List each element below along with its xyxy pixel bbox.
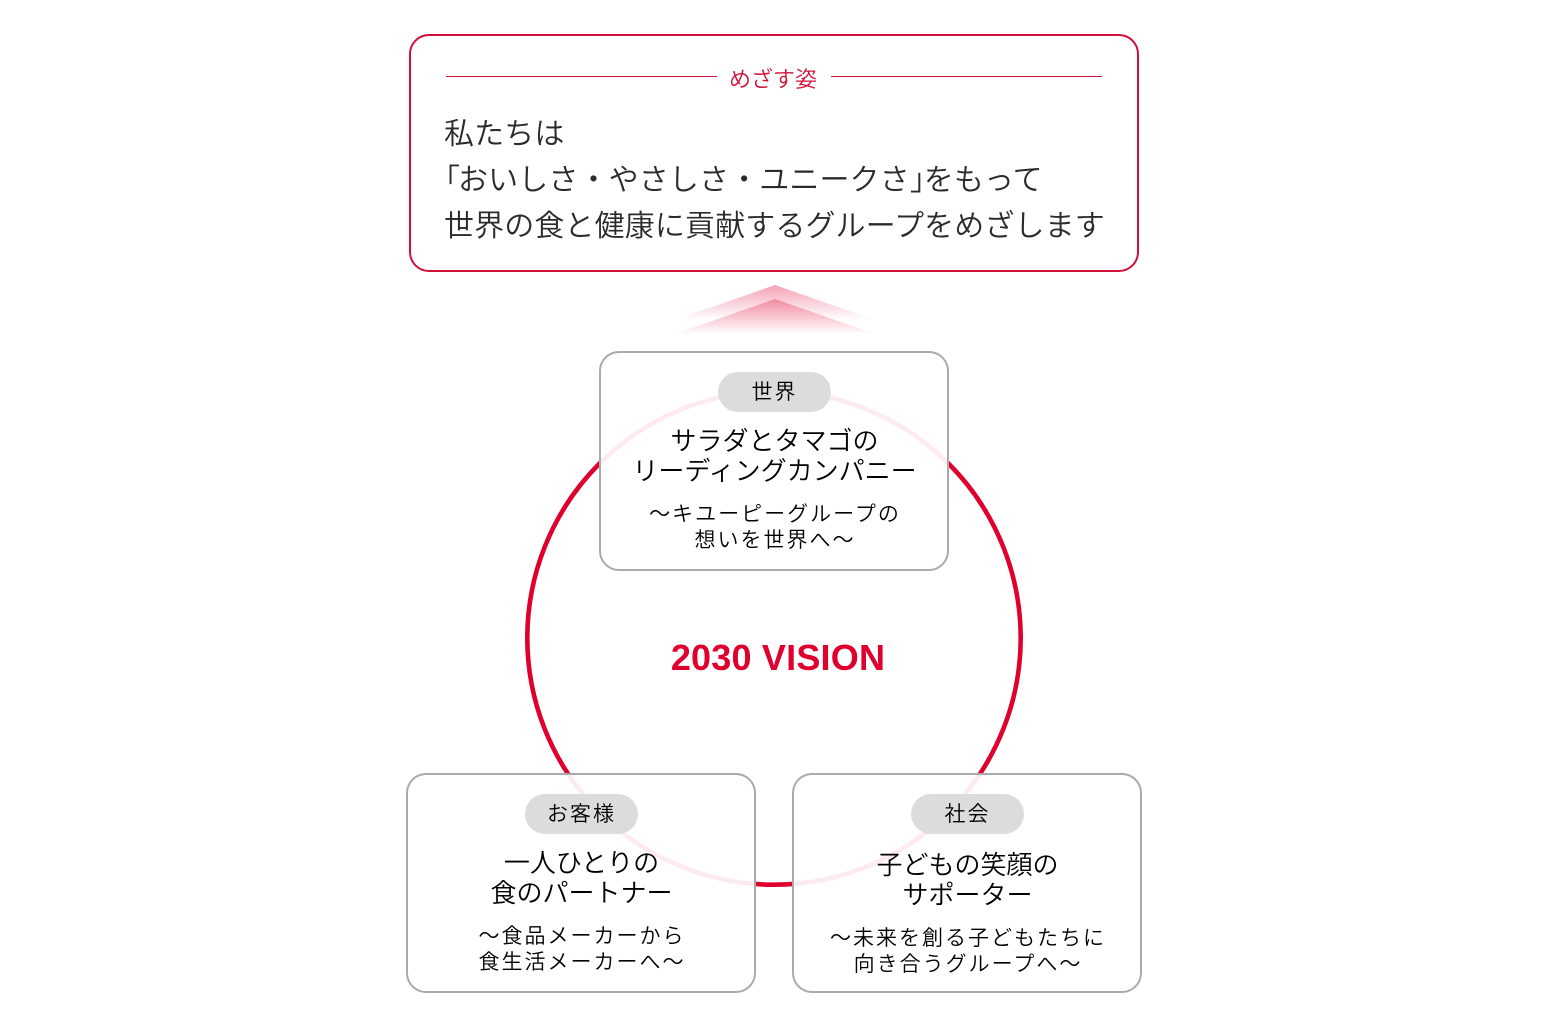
text block: vision statement: 世界の食と健康に貢献するグループをめざします [444,210,1105,243]
card subtitle: society: 向き合うグループへ〜 [854,953,1082,976]
text block: vision statement: 「 [430,164,460,197]
card title: society [876,850,1058,910]
heading: mezasu sugata: めざす姿 [729,67,817,92]
chip: customers [525,794,638,834]
text block: vision statement: 私たちは [444,118,564,151]
panel: customers [406,773,756,993]
heading rule right [831,76,1102,77]
chart: vision circle [525,396,1023,887]
text block: vision statement [430,118,1105,243]
card subtitle: customers [478,925,686,974]
panel: society [792,773,1142,993]
card title: customers [490,848,672,908]
card title: society: サポーター [902,880,1032,910]
card title: world: サラダとタマゴの [670,426,878,456]
card subtitle: customers: 〜食品メーカーから [478,925,686,948]
panel: world [599,351,949,571]
heading rule left [446,76,717,77]
card title: customers: 一人ひとりの [504,848,659,878]
card title: world [632,426,917,486]
text block: vision statement: おいしさ・やさしさ・ユニークさ をもって [458,164,1043,197]
text block: vision statement: 」 [910,164,940,197]
card title: society: 子どもの笑顔の [876,850,1058,880]
chip: world [718,372,831,412]
card subtitle: customers: 食生活メーカーへ〜 [478,951,686,974]
panel: target vision [409,34,1139,272]
card title: customers: 食のパートナー [490,878,672,908]
card title: world: リーディングカンパニー [632,456,917,486]
chip: society: 社会 [944,803,990,826]
chip: world: 世界 [752,381,798,404]
card subtitle: society [830,927,1106,976]
card subtitle: society: 〜未来を創る子どもたちに [830,927,1106,950]
card subtitle: world: 想いを世界へ〜 [694,529,856,552]
arrow: upward chevrons [684,285,866,332]
chip: customers: お客様 [547,803,616,826]
title: 2030 VISION: 2030 VISION [671,637,885,678]
card subtitle: world [649,503,901,552]
chip: society [911,794,1024,834]
card subtitle: world: 〜キユーピーグループの [649,503,901,526]
